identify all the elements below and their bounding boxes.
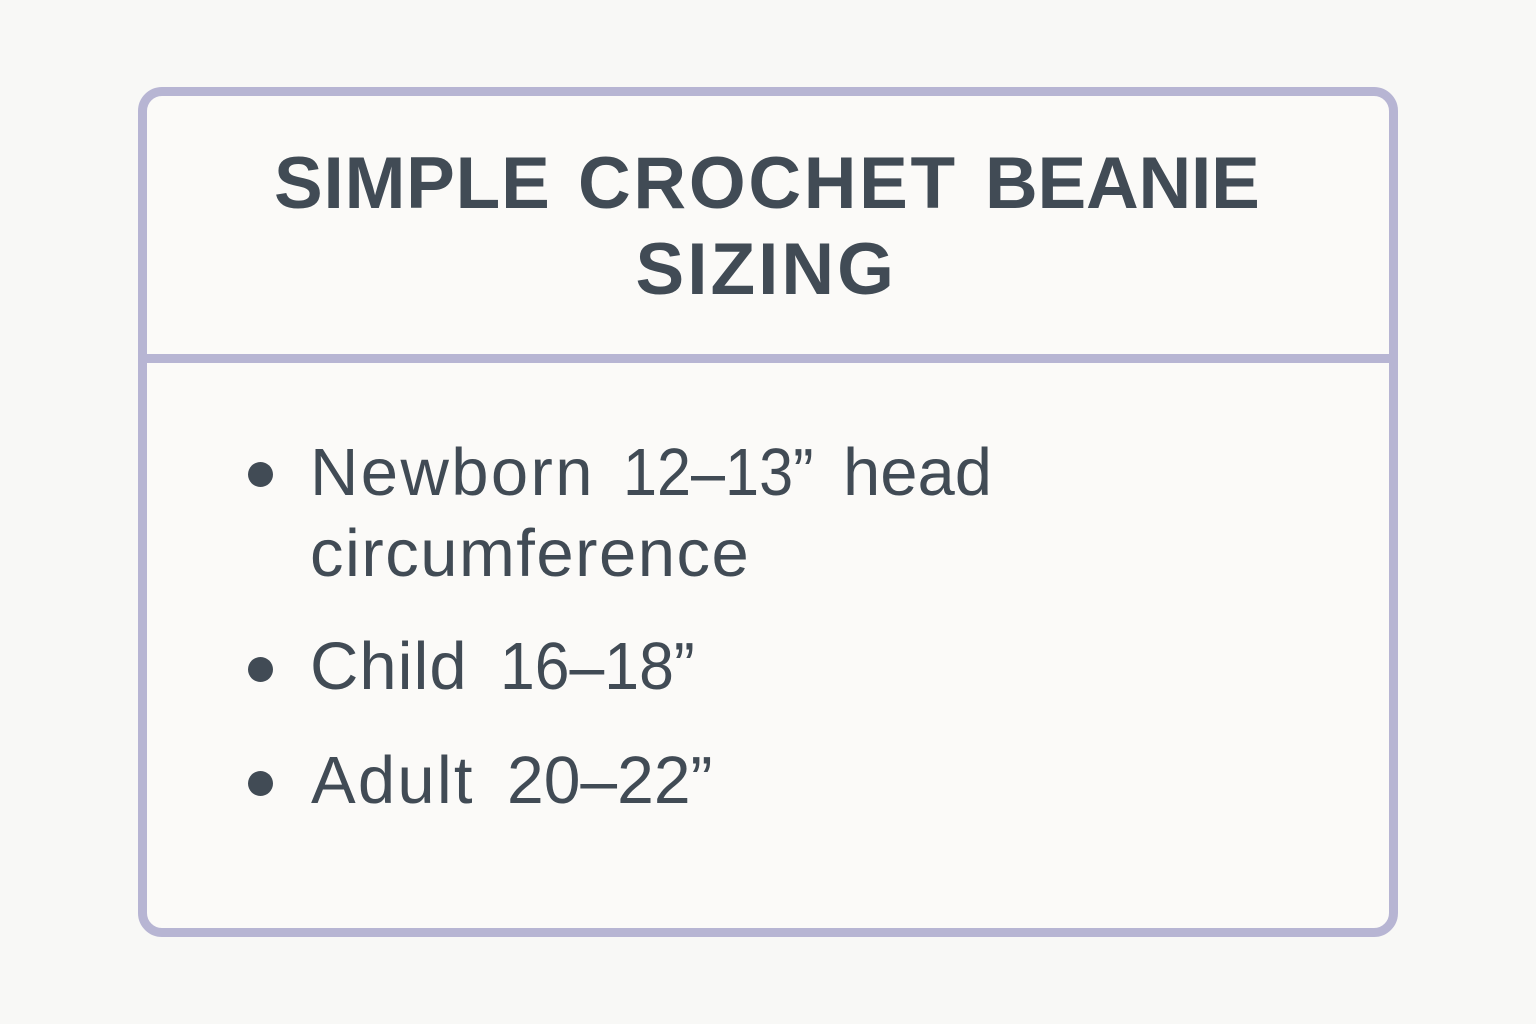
text: newborn sizing [310, 435, 992, 591]
text: child sizing: 16–18” [500, 629, 695, 704]
header divider [147, 354, 1389, 363]
bullet: adult [248, 771, 273, 796]
size list [248, 435, 992, 818]
text: child sizing: Child [310, 629, 468, 704]
text: adult sizing: Adult [311, 743, 475, 818]
text: child sizing [310, 629, 695, 704]
text: newborn sizing: head [843, 435, 992, 510]
bullet: child [248, 657, 273, 682]
title: BEANIE [985, 143, 1260, 224]
bullet: newborn [248, 462, 273, 487]
title [274, 143, 1260, 310]
text: adult sizing: 20–22” [507, 743, 712, 818]
text: newborn sizing: 12–13” [623, 435, 813, 510]
title: SIMPLE [274, 143, 551, 224]
text: newborn sizing: Newborn [310, 435, 595, 510]
text: newborn sizing: circumference [310, 516, 750, 591]
panel: sizing card [138, 87, 1398, 937]
title: SIZING [636, 229, 897, 310]
title: CROCHET [578, 143, 958, 224]
text: adult sizing [311, 743, 712, 818]
